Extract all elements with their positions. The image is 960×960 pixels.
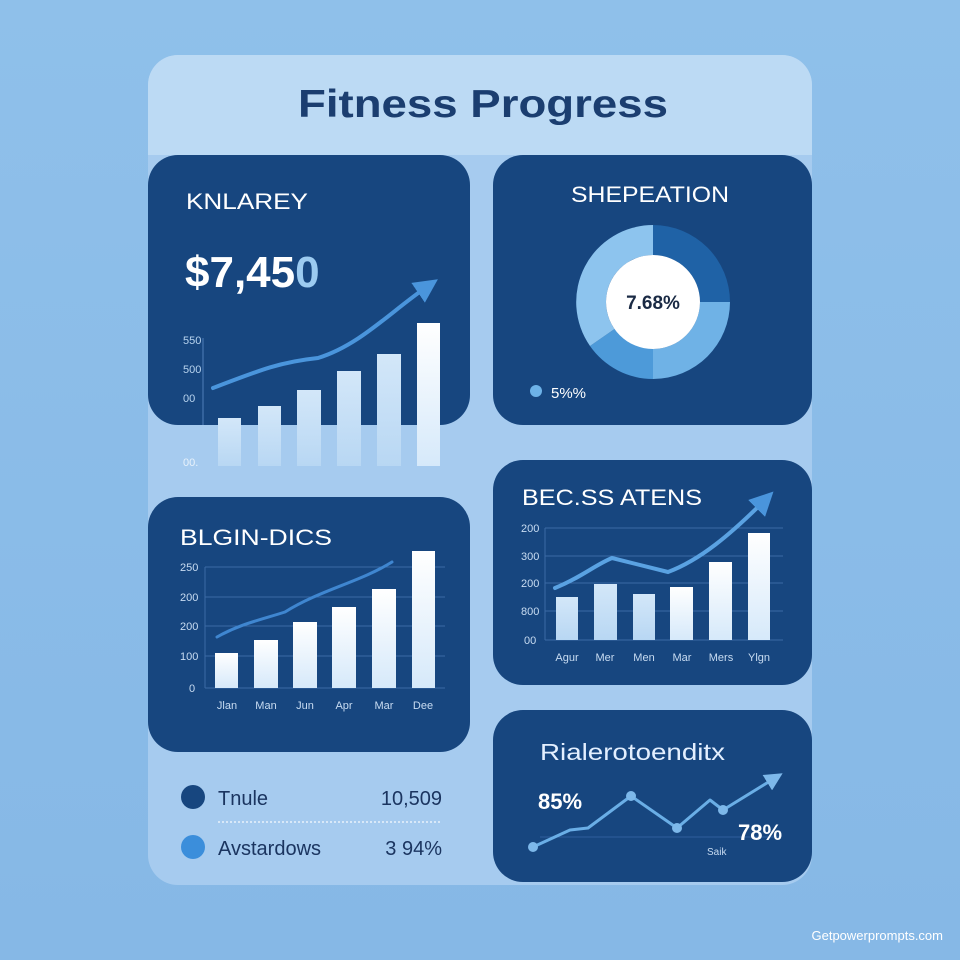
panel: donut <box>493 155 812 425</box>
value 78%: 78% <box>738 820 782 845</box>
legend item: Tnule: 10,509 <box>381 788 442 810</box>
bar chart: Jlan <box>217 700 237 712</box>
value 85%: 85% <box>538 789 582 814</box>
bar chart: 200 <box>180 592 198 604</box>
bar chart: revenue: 500 <box>183 364 201 376</box>
title: Fitness Progress <box>298 83 668 126</box>
bar chart: Men <box>633 652 655 664</box>
bar chart: Agur <box>555 652 579 664</box>
bar chart: Apr <box>335 700 353 712</box>
panel heading: BLGIN-DICS <box>180 525 332 550</box>
panel: bar chart left <box>148 497 470 752</box>
arrow: trend <box>555 500 765 588</box>
panel: line chart <box>493 710 812 882</box>
watermark: Getpowerprompts.com <box>812 928 943 943</box>
bar chart: revenue: 00 <box>183 393 195 405</box>
bar chart: Mer <box>596 652 615 664</box>
panel heading: SHEPEATION <box>571 182 729 207</box>
bar chart: 800 <box>521 606 539 618</box>
legend item: Awardows: Avstardows <box>218 838 321 860</box>
bar chart: revenue: 550 <box>183 335 201 347</box>
legend item: Awardows <box>181 835 442 860</box>
bar chart: 200 <box>521 578 539 590</box>
line chart <box>528 778 775 852</box>
container panel <box>148 55 812 885</box>
big number: $7,450 <box>185 248 320 297</box>
bar chart: Ylgn <box>748 652 770 664</box>
bar chart: 200 <box>521 523 539 535</box>
bar chart: revenue: 00. <box>183 457 198 469</box>
panel: revenue <box>148 155 470 469</box>
panel heading: Rialerotoenditx <box>540 739 726 765</box>
bar chart: Mar <box>673 652 692 664</box>
arrow: trend <box>213 286 428 388</box>
legend: 54%: 5%% <box>551 385 586 402</box>
header band <box>148 55 812 155</box>
legend block <box>181 785 442 860</box>
bar chart: Mers <box>709 652 734 664</box>
bar chart: Man <box>255 700 277 712</box>
bar chart <box>521 500 783 664</box>
bar chart: Dee <box>413 700 433 712</box>
legend: 54% <box>530 385 586 402</box>
panel: bar chart right <box>493 460 812 685</box>
legend item: Awardows: 3 94% <box>385 838 442 860</box>
bar chart: Mar <box>375 700 394 712</box>
donut chart <box>576 225 730 379</box>
legend item: Tnule <box>181 785 442 810</box>
bar chart: Jun <box>296 700 314 712</box>
bar chart <box>180 551 445 712</box>
bar chart: 00 <box>524 635 536 647</box>
legend item: Tnule: Tnule <box>218 788 268 810</box>
bar chart: 200 <box>180 621 198 633</box>
bar chart: revenue <box>183 286 440 469</box>
panel: line chart: Saik <box>707 847 727 858</box>
bar chart: 250 <box>180 562 198 574</box>
panel heading: BEC.SS ATENS <box>522 485 702 510</box>
bar chart: 300 <box>521 551 539 563</box>
panel heading: KNEAREY: KNLAREY <box>186 189 308 214</box>
donut chart: 7.68% <box>626 293 680 314</box>
bar chart: 100 <box>180 651 198 663</box>
bar chart: 0 <box>189 683 195 695</box>
